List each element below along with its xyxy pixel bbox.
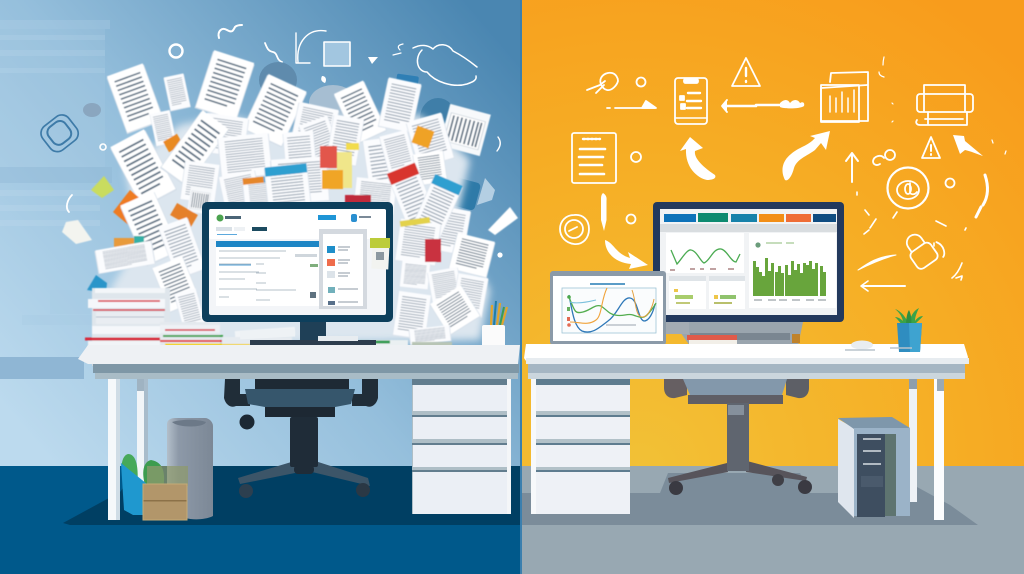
icon: clipboard checklist (675, 78, 707, 124)
monitor side panel (319, 229, 367, 309)
panel: cluttered side background (0, 0, 521, 574)
pile backing haze (110, 115, 490, 345)
icon: computer mouse (845, 340, 912, 350)
arrow: thin up (846, 153, 858, 182)
window blinds (0, 20, 112, 325)
left desk (78, 345, 520, 520)
icon: checklist document (572, 133, 616, 183)
icon: small warning triangle (922, 137, 940, 158)
icon: pencil cup (482, 301, 507, 350)
paper pile behind monitor (62, 50, 518, 345)
desk legs (108, 379, 511, 520)
arrow: curved into monitor (605, 240, 648, 269)
icon: at sign circle (888, 168, 928, 208)
left office chair (224, 379, 378, 498)
dashboard bar chart panel (749, 233, 836, 308)
dashboard line chart panel (666, 233, 744, 273)
panel: organised side background (520, 0, 1024, 574)
desk drawers (412, 379, 507, 514)
left computer monitor (202, 202, 393, 346)
letters c o (873, 150, 895, 165)
small circles (626, 78, 954, 224)
icon: pen down arrow (601, 193, 607, 231)
clutter background shapes (83, 57, 503, 258)
clutter doodles in white line (37, 25, 500, 212)
laptop with line chart (546, 271, 674, 353)
icon: printer (916, 85, 973, 125)
desk legs (531, 379, 944, 520)
right desk (524, 344, 969, 520)
laptop chart (562, 283, 656, 333)
arrow: curved up-left (680, 137, 715, 180)
filing cabinet (838, 417, 910, 518)
icon: clock circle (560, 215, 589, 244)
monitor data table (216, 241, 321, 306)
paper stack on desk (85, 288, 452, 350)
arrow: curved up-right (783, 131, 830, 180)
right computer monitor (653, 202, 844, 346)
monitor stand (665, 322, 803, 346)
waste bin (167, 418, 213, 519)
arrow: swoosh into monitor right (858, 255, 896, 270)
icon: chart document (821, 72, 868, 122)
arrow: long left (722, 100, 804, 112)
stack of books (670, 335, 737, 352)
dashboard lower panels (669, 276, 745, 309)
arrow: dashed right (607, 101, 656, 108)
monitor header (209, 209, 386, 239)
dashboard tabs (664, 213, 836, 222)
recycling bin with plant (121, 454, 164, 515)
desk drawers (536, 379, 630, 514)
right office chair (664, 379, 812, 495)
icon: warning triangle (732, 58, 760, 86)
arrow: big up-left (953, 135, 983, 156)
icon: eraser (587, 73, 618, 93)
loose curves (857, 57, 1006, 280)
icon: padlock (900, 225, 947, 272)
sticky note on monitor (370, 238, 390, 269)
process doodles: white arrows and icons (560, 57, 1006, 291)
arrow: left lower right (861, 281, 905, 291)
icon: potted plant (895, 308, 923, 352)
cardboard box (143, 466, 188, 520)
